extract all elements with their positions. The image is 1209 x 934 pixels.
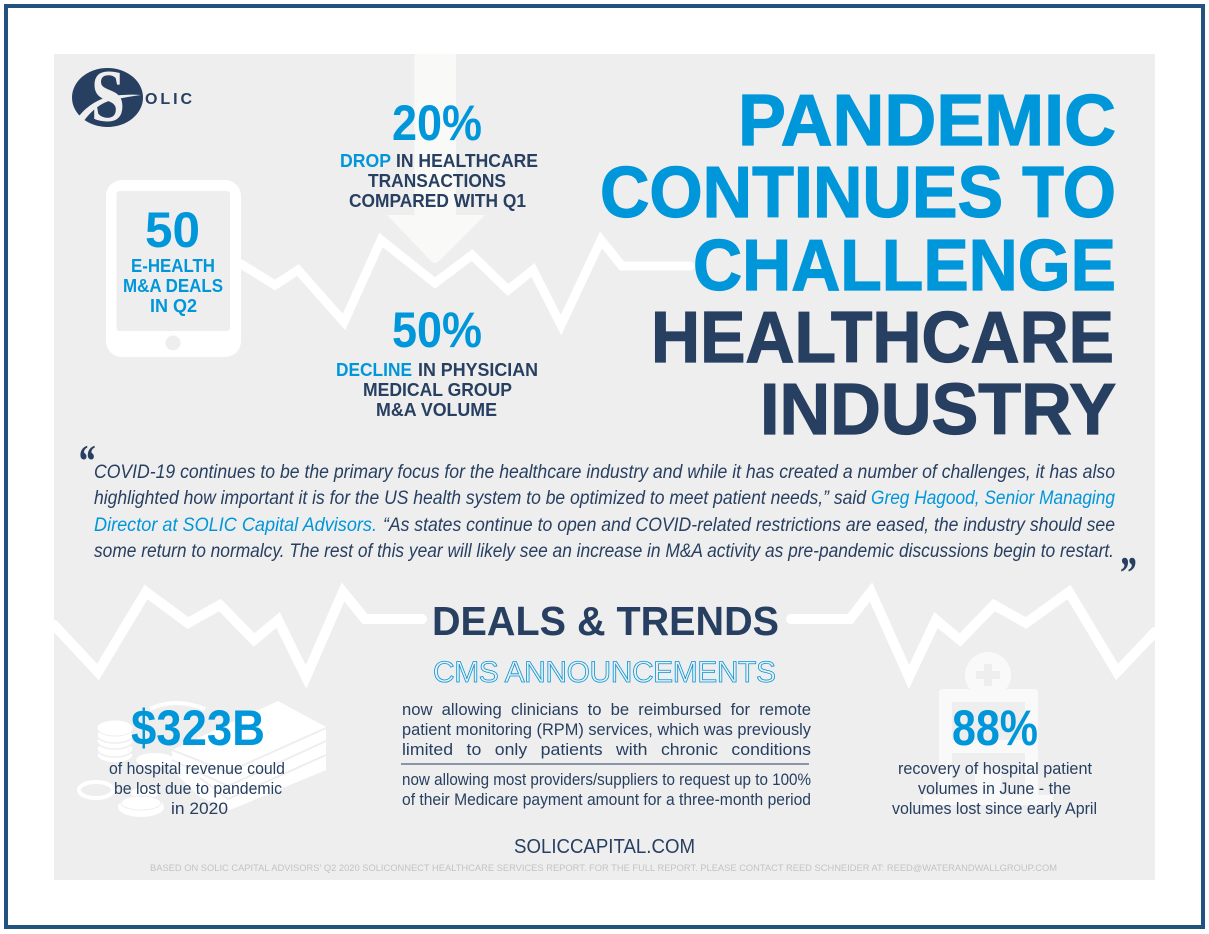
stat: $323B hospital revenue: $323B — [131, 700, 265, 756]
text block: first CMS announcement — [402, 701, 812, 759]
logo: SOLIC: S — [91, 56, 125, 138]
quote text block: highlighted how important it is for the US health system to be optimized to meet patient needs,” said — [94, 488, 867, 509]
logo: SOLIC: OLIC — [145, 91, 192, 108]
heading: deals and trends: DEALS & TRENDS — [432, 598, 779, 644]
stat: $323B hospital revenue: be lost due to pandemic — [114, 780, 282, 798]
quote text block: Greg Hagood, Senior Managing — [871, 488, 1115, 509]
icon: cash and coins — [79, 701, 326, 817]
title: PANDEMIC — [738, 81, 1116, 161]
stat: 20% drop: DROP — [340, 151, 391, 171]
text block: first CMS announcement: now allowing clinicians to be reimbursed for remote — [402, 701, 811, 719]
stat: 88% patient volumes: 88% — [952, 700, 1038, 756]
quote text block — [77, 435, 1136, 598]
text block: first CMS announcement: patient monitoring (RPM) services, which was previously — [402, 721, 812, 739]
text block: second CMS announcement: of their Medicare payment amount for a three-month period — [402, 791, 811, 809]
footer note: BASED ON SOLIC CAPITAL ADVISORS' Q2 2020 SOLICONNECT HEALTHCARE SERVICES REPORT. FOR THE FULL REPORT. PLEASE CONTACT REED SCHNEIDER AT: REED@WATERANDWALLGROUP.COM — [150, 863, 1057, 874]
line chart zigzag: bottom right — [791, 592, 1155, 677]
stat: 20% drop: 20% — [392, 95, 482, 151]
stat: 50% decline: DECLINE — [336, 360, 412, 380]
website: SOLICCAPITAL.COM — [514, 836, 695, 858]
stat: 50% decline: M&A VOLUME — [376, 400, 497, 420]
text block: first CMS announcement: limited to only patients with chronic conditions — [402, 741, 811, 759]
stat: 50% decline: IN PHYSICIAN — [418, 360, 538, 380]
title — [600, 81, 1116, 450]
quote text block: some return to normalcy. The rest of this year will likely see an increase in M&A activity as pre-pandemic discussions begin to restart. — [94, 541, 1114, 562]
icon and stat: tablet with e-health deals: IN Q2 — [150, 296, 197, 316]
icon: hospital — [923, 652, 1053, 805]
logo: SOLIC — [72, 56, 192, 138]
quote text block: ” — [1118, 547, 1136, 598]
title: CONTINUES TO — [600, 153, 1116, 233]
quote text block: Director at SOLIC Capital Advisors. — [94, 515, 377, 536]
stat: 20% drop: TRANSACTIONS — [368, 171, 506, 191]
icon: down arrow — [387, 54, 485, 263]
title: CHALLENGE — [693, 226, 1116, 306]
stat: 88% patient volumes — [892, 700, 1097, 818]
icon and stat: tablet with e-health deals: 50 — [145, 202, 200, 258]
stat: 20% drop: IN HEALTHCARE — [396, 151, 538, 171]
line chart zigzag: top — [241, 240, 690, 325]
stat: $323B hospital revenue: in 2020 — [171, 800, 228, 818]
icon and stat: tablet with e-health deals — [106, 180, 241, 357]
title: INDUSTRY — [760, 370, 1116, 450]
stat: 88% patient volumes: volumes lost since early April — [892, 800, 1097, 818]
title: HEALTHCARE — [651, 298, 1114, 378]
quote text block: COVID-19 continues to be the primary focus for the healthcare industry and while it has created a number of challenges, it has also — [94, 462, 1115, 483]
quote text block: “ — [77, 435, 95, 486]
quote text block: “As states continue to open and COVID-related restrictions are eased, the industry should see — [383, 515, 1115, 536]
icon and stat: tablet with e-health deals: E-HEALTH — [131, 256, 215, 276]
stat: $323B hospital revenue — [109, 700, 285, 818]
stat: 50% decline: MEDICAL GROUP — [363, 380, 512, 400]
stat: $323B hospital revenue: of hospital revenue could — [109, 760, 285, 778]
stat: 20% drop: COMPARED WITH Q1 — [349, 191, 526, 211]
stat: 88% patient volumes: volumes in June - the — [918, 780, 1071, 798]
stat: 50% decline — [336, 302, 538, 420]
text block: second CMS announcement: now allowing most providers/suppliers to request up to 100% — [402, 771, 811, 789]
stat: 20% drop — [340, 95, 538, 211]
text block: second CMS announcement — [402, 771, 811, 809]
subheading: CMS announcements: CMS ANNOUNCEMENTS — [433, 656, 776, 689]
line chart zigzag: bottom left — [54, 592, 422, 677]
icon and stat: tablet with e-health deals: M&A DEALS — [123, 276, 223, 296]
stat: 50% decline: 50% — [392, 302, 482, 358]
stat: 88% patient volumes: recovery of hospital patient — [898, 760, 1092, 778]
